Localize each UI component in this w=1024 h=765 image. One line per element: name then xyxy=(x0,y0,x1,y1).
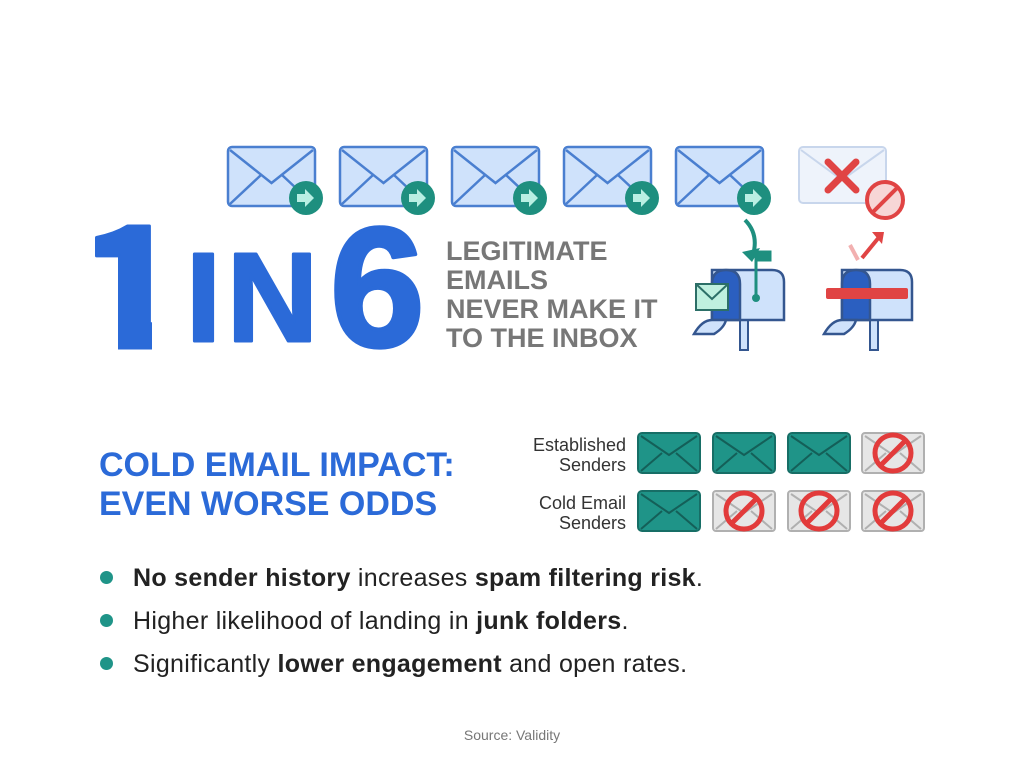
bullet 1: No sender history increases spam filtering risk. xyxy=(133,564,703,592)
text: legitimate emails never make it to the inbox: LEGITIMATE xyxy=(446,236,608,266)
comparison grid: Senders xyxy=(559,455,626,475)
headline: 1 in 6: IN xyxy=(186,227,324,368)
headline: 1 in 6: 1 xyxy=(80,154,182,397)
bullet 3: Significantly lower engagement and open rates. xyxy=(133,650,687,678)
comparison grid: Cold Email xyxy=(539,493,626,513)
text: legitimate emails never make it to the inbox: TO THE INBOX xyxy=(446,323,638,353)
heading: cold email impact xyxy=(99,446,455,523)
headline: 1 in 6 xyxy=(95,224,420,350)
icon: mailbox receiving xyxy=(694,220,784,350)
heading: cold email impact: COLD EMAIL IMPACT: xyxy=(99,446,455,484)
comparison grid: Established xyxy=(533,435,626,455)
heading: cold email impact: EVEN WORSE ODDS xyxy=(99,485,437,523)
comparison grid: Senders xyxy=(559,513,626,533)
text: legitimate emails never make it to the inbox xyxy=(446,236,658,353)
icon: mailbox blocked xyxy=(824,232,912,350)
source: Source: Validity xyxy=(464,727,560,743)
bullet 2: Higher likelihood of landing in junk folders. xyxy=(133,607,629,635)
icon: rejected envelope xyxy=(799,147,903,218)
comparison grid xyxy=(533,433,924,533)
icon: delivered envelopes row xyxy=(228,147,771,215)
headline: 1 in 6: 6 xyxy=(330,193,425,383)
text: legitimate emails never make it to the inbox: EMAILS xyxy=(446,265,548,295)
text: legitimate emails never make it to the inbox: NEVER MAKE IT xyxy=(446,294,658,324)
